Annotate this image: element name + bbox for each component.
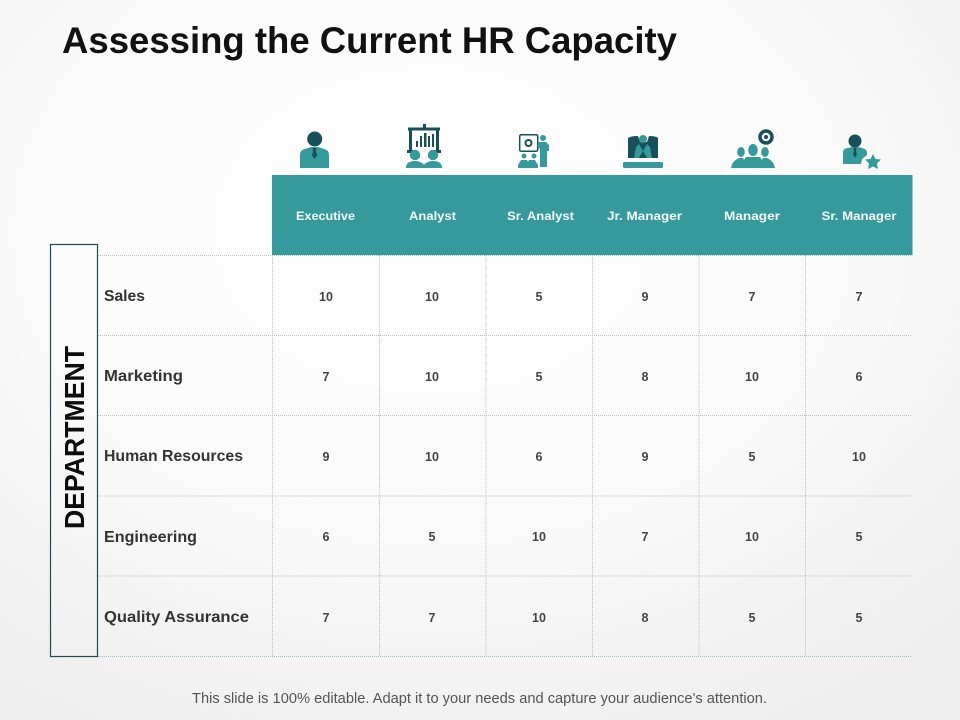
table values: 7 — [323, 611, 330, 625]
table values: 10 — [319, 290, 333, 304]
table values: 9 — [642, 290, 649, 304]
table values: 10 — [852, 450, 866, 464]
table values: 7 — [856, 290, 863, 304]
icon: executive — [300, 132, 329, 168]
table values: 9 — [323, 450, 330, 464]
header: Sr. Analyst: Sr. Analyst — [507, 209, 574, 223]
table values: 7 — [749, 290, 756, 304]
icon: sr. analyst — [518, 135, 549, 168]
header: Jr. Manager: Jr. Manager — [607, 209, 682, 223]
row label: Quality Assurance: Quality Assurance — [104, 609, 249, 626]
table values: 5 — [429, 530, 436, 544]
icon: analyst — [406, 124, 442, 168]
icon: sr. manager — [843, 134, 881, 169]
table values: 7 — [642, 530, 649, 544]
table values: 10 — [532, 530, 546, 544]
table values: 8 — [642, 611, 649, 625]
table values: 5 — [749, 450, 756, 464]
header: Executive: Executive — [296, 209, 355, 223]
table header band — [272, 175, 912, 255]
department label: DEPARTMENT — [59, 346, 90, 529]
row labels — [104, 288, 249, 626]
footer note: This slide is 100% editable. Adapt it to your needs and capture your audience's attention. — [192, 691, 767, 707]
icon: manager — [731, 131, 775, 168]
header: Analyst: Analyst — [409, 209, 456, 223]
table values: 10 — [425, 290, 439, 304]
table values: 5 — [749, 611, 756, 625]
icon: jr. manager — [623, 135, 663, 168]
table values: 10 — [745, 370, 759, 384]
title: Assessing the Current HR Capacity — [62, 20, 677, 61]
table values: 10 — [745, 530, 759, 544]
header: Manager: Manager — [724, 209, 780, 223]
row label: Human Resources: Human Resources — [104, 448, 243, 465]
department label box — [50, 244, 98, 656]
table values: 6 — [536, 450, 543, 464]
table values — [319, 290, 866, 625]
table values: 10 — [425, 450, 439, 464]
row label: Marketing: Marketing — [104, 368, 183, 385]
table values: 5 — [536, 370, 543, 384]
table values: 5 — [536, 290, 543, 304]
table values: 9 — [642, 450, 649, 464]
table values: 5 — [856, 611, 863, 625]
table values: 7 — [429, 611, 436, 625]
table values: 6 — [856, 370, 863, 384]
row label: Sales: Sales — [104, 288, 145, 305]
table values: 5 — [856, 530, 863, 544]
table values: 7 — [323, 370, 330, 384]
table values: 10 — [425, 370, 439, 384]
table values: 6 — [323, 530, 330, 544]
table values: 10 — [532, 611, 546, 625]
table values: 8 — [642, 370, 649, 384]
header: Sr. Manager: Sr. Manager — [822, 209, 897, 223]
row label: Engineering: Engineering — [104, 529, 197, 546]
